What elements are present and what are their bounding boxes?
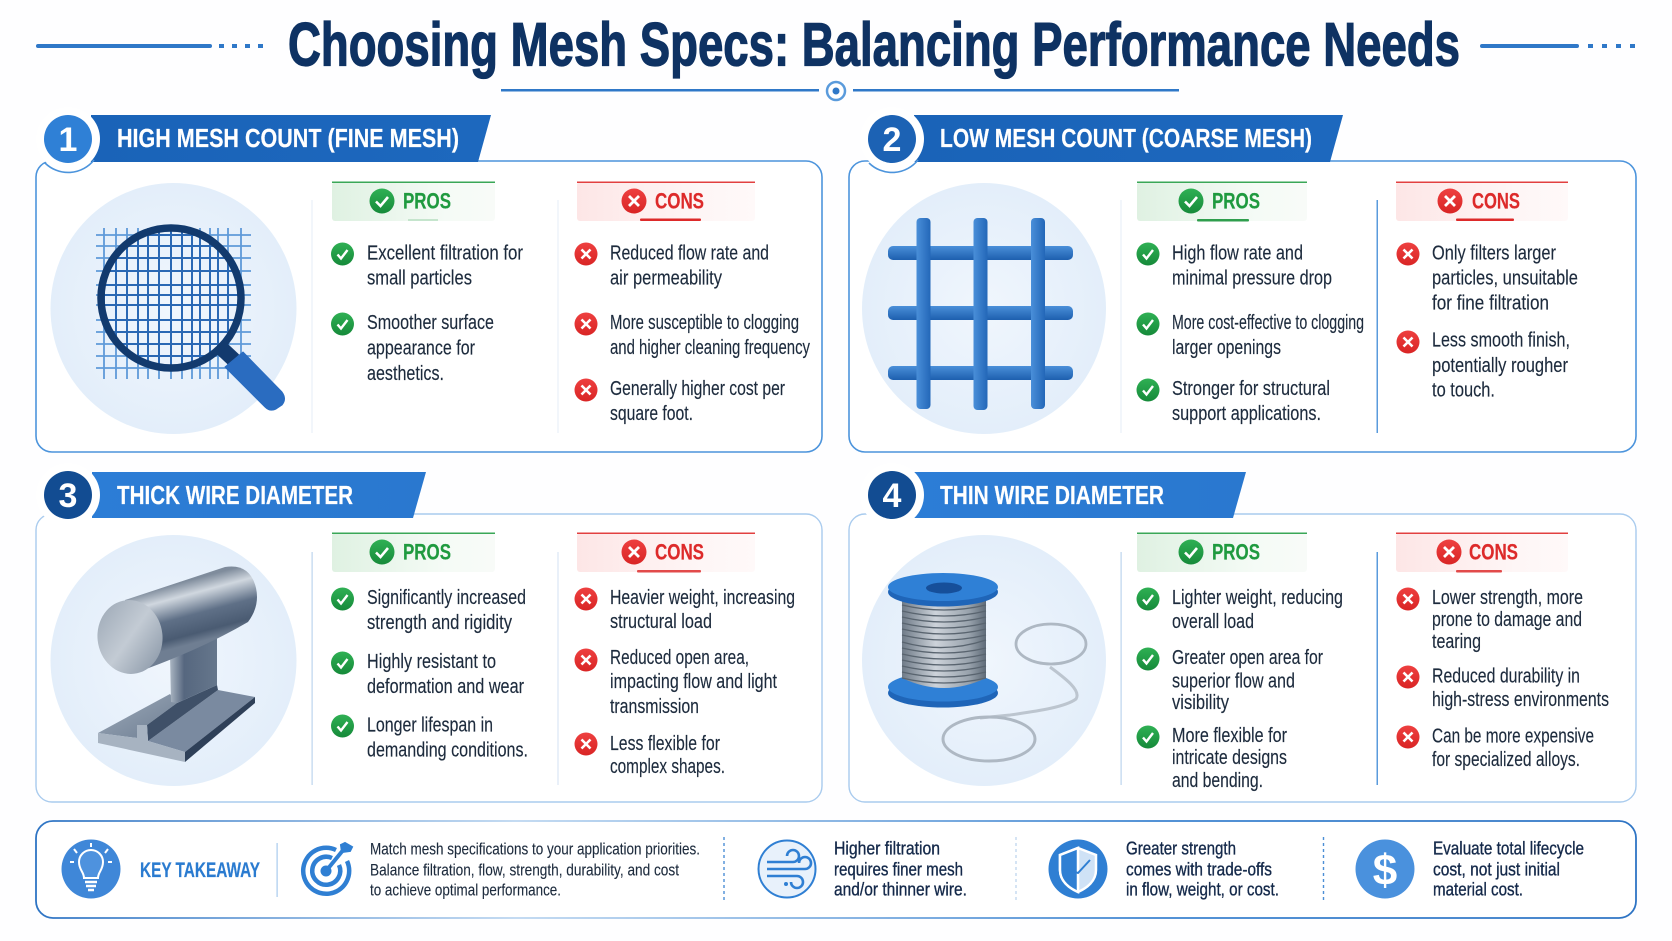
pros header [332, 182, 495, 221]
panel 3: thick wire [36, 463, 822, 802]
dashed divider [1322, 837, 1324, 901]
pro item: Excellent filtration for [367, 242, 523, 264]
pros header: PROS [403, 540, 451, 564]
con item: high-stress environments [1432, 689, 1609, 711]
pros header [1137, 182, 1307, 222]
divider [312, 200, 313, 433]
icon: dollar: $ [1373, 846, 1397, 895]
con item: and higher cleaning frequency [610, 337, 810, 359]
divider [558, 200, 559, 433]
heading banner 2: LOW MESH COUNT (COARSE MESH) [940, 123, 1312, 153]
con item: air permeability [610, 268, 722, 290]
title underline with target [501, 82, 1179, 100]
note: lifecycle cost: cost, not just initial [1433, 860, 1560, 880]
pro item: Stronger for structural [1172, 378, 1330, 400]
con item: impacting flow and light [610, 671, 777, 693]
cons header: CONS [655, 188, 704, 214]
con item: More susceptible to clogging [610, 312, 799, 334]
pro item: minimal pressure drop [1172, 268, 1332, 290]
con item: Less flexible for [610, 733, 720, 755]
pro item: visibility [1172, 692, 1229, 714]
pro item [331, 587, 526, 634]
pro item [1136, 647, 1323, 714]
con item: for specialized alloys. [1432, 749, 1580, 771]
pro item [1136, 725, 1287, 792]
panel 2: low mesh count [849, 107, 1636, 452]
heading banner 3: THICK WIRE DIAMETER [117, 480, 353, 510]
pro item: support applications. [1172, 403, 1321, 425]
con item [1396, 242, 1578, 314]
icon: target with arrow [303, 843, 352, 894]
cons header [1396, 532, 1568, 572]
note: filtration: Higher filtration [834, 839, 940, 859]
con item [574, 647, 777, 718]
con item [1396, 666, 1609, 711]
con item: for fine filtration [1432, 292, 1549, 314]
pro item: intricate designs [1172, 747, 1287, 769]
note: filtration: and/or thinner wire. [834, 879, 967, 899]
pro item [1136, 242, 1332, 290]
number badge 3 [36, 463, 100, 527]
icon: airflow [758, 840, 816, 898]
con item: Heavier weight, increasing [610, 587, 795, 609]
heading banner 4 [914, 472, 1246, 518]
illustration: coarse mesh grid [862, 183, 1106, 434]
pro item: Smoother surface [367, 312, 494, 334]
con item [574, 242, 769, 290]
title rule: left [36, 44, 263, 48]
pro item: aesthetics. [367, 363, 444, 385]
con item: Can be more expensive [1432, 726, 1594, 748]
con item [574, 378, 785, 425]
dashed divider [1015, 837, 1017, 901]
pro item [1136, 312, 1364, 359]
con item: to touch. [1432, 380, 1495, 402]
number badge 1: 1 [59, 121, 77, 159]
divider [1376, 552, 1378, 785]
con item: Reduced open area, [610, 647, 749, 669]
pros header [332, 532, 495, 572]
pro item: Significantly increased [367, 587, 526, 609]
divider [1120, 200, 1122, 433]
con item: potentially rougher [1432, 355, 1568, 377]
pro item: larger openings [1172, 337, 1281, 359]
con item: particles, unsuitable [1432, 268, 1578, 290]
con item [1396, 726, 1594, 771]
con item [574, 732, 725, 778]
cons header [577, 182, 755, 221]
illustration: thick wire rod on rail [50, 535, 296, 786]
cons header: CONS [1472, 188, 1520, 214]
note: strength: in flow, weight, or cost. [1126, 879, 1279, 899]
pro item [331, 651, 524, 698]
pro item: More flexible for [1172, 725, 1287, 747]
takeaway text: Match mesh specifications to your application priorities. [370, 840, 700, 859]
divider [1376, 200, 1378, 433]
con item [1396, 587, 1583, 653]
note: strength: Greater strength [1126, 839, 1236, 859]
con item: square foot. [610, 403, 693, 425]
panel: key takeaway band [36, 821, 1636, 918]
con item: Only filters larger [1432, 242, 1556, 264]
con item: tearing [1432, 631, 1481, 653]
con item [1396, 330, 1570, 402]
number badge 2: 2 [883, 121, 901, 159]
heading banner 1: HIGH MESH COUNT (FINE MESH) [117, 123, 459, 153]
pro item: and bending. [1172, 770, 1263, 792]
pro item: More cost-effective to clogging [1172, 312, 1364, 334]
panel 1: high mesh count [36, 107, 822, 452]
note: strength: comes with trade-offs [1126, 860, 1272, 880]
icon: dollar [1356, 840, 1414, 898]
pro item: small particles [367, 268, 472, 290]
number badge 3: 3 [59, 477, 77, 515]
con item: Reduced durability in [1432, 666, 1580, 688]
note: strength [1126, 839, 1279, 899]
heading banner 3 [92, 472, 426, 518]
key takeaway label: KEY TAKEAWAY [140, 859, 260, 882]
number badge 4 [860, 463, 924, 527]
dashed divider [723, 837, 725, 901]
panel 4: thin wire [849, 463, 1636, 802]
illustration: spool of thin wire [862, 535, 1106, 786]
number badge 1 [36, 107, 100, 172]
con item: prone to damage and [1432, 609, 1582, 631]
note: lifecycle cost [1433, 839, 1584, 899]
con item: structural load [610, 611, 712, 633]
heading banner 2 [914, 115, 1343, 162]
number badge 2 [860, 107, 924, 172]
note: lifecycle cost: Evaluate total lifecycle [1433, 839, 1584, 859]
cons header [1396, 182, 1568, 221]
divider [276, 843, 278, 897]
note: lifecycle cost: material cost. [1433, 879, 1523, 899]
pros header: PROS [1212, 188, 1260, 214]
pro item: overall load [1172, 611, 1254, 633]
icon: light bulb [62, 840, 120, 898]
title rule: right [1480, 44, 1635, 48]
pro item [331, 242, 523, 290]
pro item: appearance for [367, 338, 475, 360]
pro item: Highly resistant to [367, 651, 496, 673]
note: filtration: requires finer mesh [834, 860, 963, 880]
pro item: superior flow and [1172, 670, 1295, 692]
con item: Generally higher cost per [610, 378, 785, 400]
heading banner 4: THIN WIRE DIAMETER [940, 480, 1164, 510]
divider [558, 552, 559, 785]
con item: complex shapes. [610, 756, 725, 778]
pro item: Greater open area for [1172, 647, 1323, 669]
con item [574, 587, 795, 633]
illustration: magnifier over fine mesh [50, 183, 296, 434]
con item [574, 312, 810, 359]
number badge 4: 4 [883, 477, 902, 515]
divider [312, 552, 313, 785]
pro item [1136, 587, 1343, 633]
pros header [1137, 532, 1307, 572]
divider [1120, 552, 1122, 785]
takeaway text [370, 840, 700, 899]
takeaway text: to achieve optimal performance. [370, 880, 561, 899]
pros header: PROS [1212, 540, 1260, 564]
icon: shield [1048, 840, 1108, 898]
heading banner 1 [91, 115, 491, 162]
takeaway text: Balance filtration, flow, strength, durability, and cost [370, 860, 679, 880]
pro item: strength and rigidity [367, 612, 512, 634]
cons header: CONS [655, 540, 704, 564]
pros header: PROS [403, 188, 451, 214]
pro item [331, 714, 528, 762]
pro item [331, 312, 494, 385]
con item: Less smooth finish, [1432, 330, 1570, 352]
pro item: High flow rate and [1172, 242, 1303, 264]
cons header [577, 532, 755, 572]
pro item: demanding conditions. [367, 740, 528, 762]
pro item: Longer lifespan in [367, 714, 493, 736]
con item: Lower strength, more [1432, 587, 1583, 609]
pro item: deformation and wear [367, 676, 524, 698]
con item: transmission [610, 696, 699, 718]
note: filtration [834, 839, 967, 899]
pro item [1136, 378, 1330, 425]
pro item: Lighter weight, reducing [1172, 587, 1343, 609]
cons header: CONS [1469, 540, 1518, 564]
con item: Reduced flow rate and [610, 242, 769, 264]
